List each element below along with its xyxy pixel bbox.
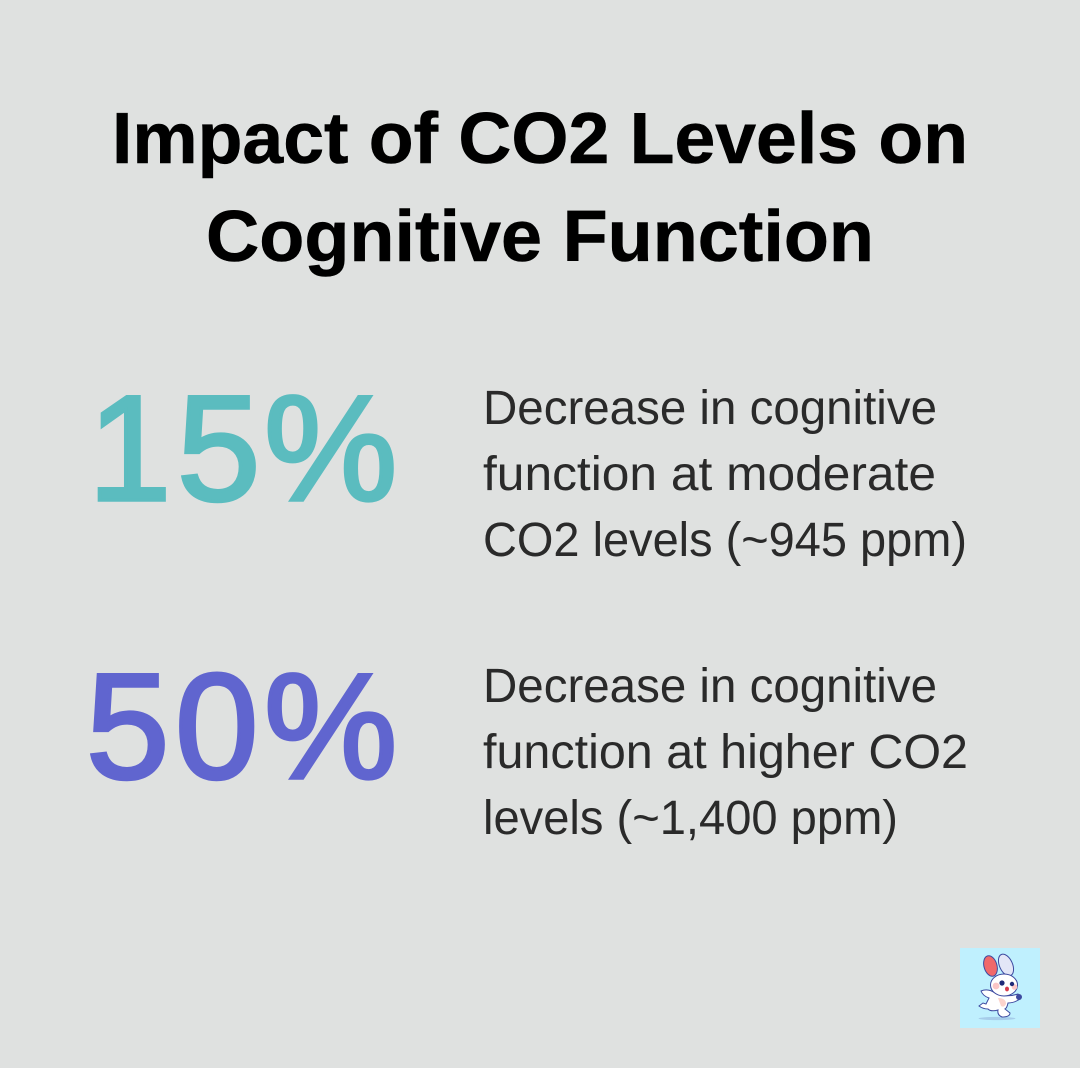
title: Impact of CO2 Levels on: [112, 99, 968, 179]
statistic: 50%: 50%: [86, 642, 397, 810]
icon: running bunny logo: [960, 948, 1040, 1028]
description: 50%: Decrease in cognitive: [483, 660, 937, 713]
description: 15%: Decrease in cognitive: [483, 382, 937, 435]
description: 15%: function at moderate: [483, 448, 936, 501]
description: 50%: [483, 660, 968, 845]
statistic: 15%: 15%: [88, 364, 397, 532]
description: 15%: CO2 levels (~945 ppm): [483, 514, 967, 567]
title: Cognitive Function: [206, 197, 874, 277]
title: [112, 99, 968, 277]
description: 15%: [483, 382, 967, 567]
description: 50%: levels (~1,400 ppm): [483, 792, 898, 845]
description: 50%: function at higher CO2: [483, 726, 968, 779]
